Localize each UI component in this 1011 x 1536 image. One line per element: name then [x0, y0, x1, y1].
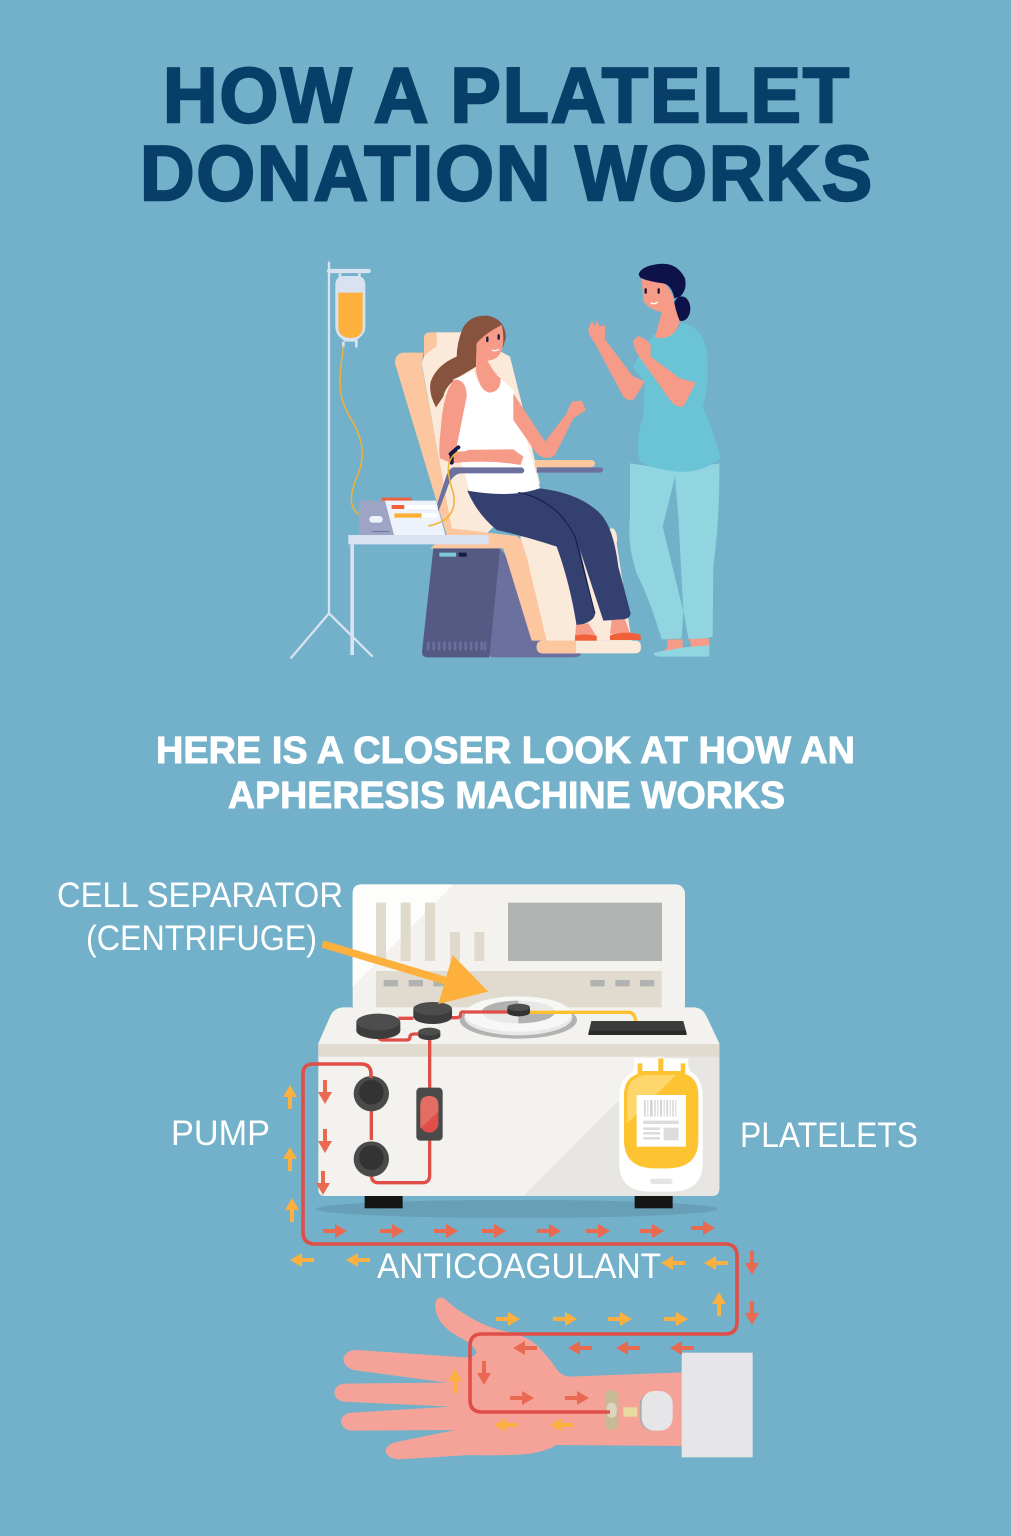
icon: IV stand: [291, 262, 373, 658]
subheading: HERE IS A CLOSER LOOK AT HOW AN: [156, 730, 855, 772]
reclining chair: [395, 332, 641, 653]
cuff bulb: [640, 1391, 673, 1431]
hand with cannula: [334, 1297, 753, 1459]
flow arrows: orange: [283, 1085, 728, 1432]
sleeve: [682, 1353, 753, 1457]
bandage and cannula: [605, 1390, 637, 1430]
label: cell separator: (CENTRIFUGE): [86, 919, 317, 958]
machine tubing: [371, 1012, 636, 1183]
apheresis machine: [316, 884, 719, 1218]
arrow: to centrifuge: [322, 940, 488, 1004]
hand: [334, 1297, 683, 1459]
platelet bag: [619, 1057, 703, 1192]
label: anticoagulant: ANTICOAGULANT: [377, 1247, 661, 1286]
person: nurse: [588, 264, 721, 657]
pump rotors: [354, 1002, 687, 1177]
illustration: donor in chair with nurse: [291, 262, 721, 658]
label: cell separator: [57, 876, 343, 958]
subheading: [156, 730, 855, 817]
flow tube: [303, 1064, 737, 1412]
machine upper panel: [353, 884, 685, 1014]
machine shadow: [316, 1200, 718, 1218]
side table with monitor: [348, 498, 489, 655]
subheading: APHERESIS MACHINE WORKS: [228, 775, 785, 817]
person: donor: [428, 316, 641, 641]
label: cell separator: CELL SEPARATOR: [57, 876, 343, 915]
machine base: [318, 1007, 719, 1208]
label: pump: PUMP: [171, 1114, 270, 1153]
centrifuge: [460, 996, 577, 1039]
title: [140, 51, 874, 217]
flow arrows: red: [316, 1080, 759, 1405]
chair base: [422, 548, 582, 657]
title: DONATION WORKS: [140, 129, 874, 217]
filter chamber: [416, 1088, 443, 1141]
label: platelets: PLATELETS: [740, 1116, 918, 1155]
title: HOW A PLATELET: [163, 51, 851, 139]
